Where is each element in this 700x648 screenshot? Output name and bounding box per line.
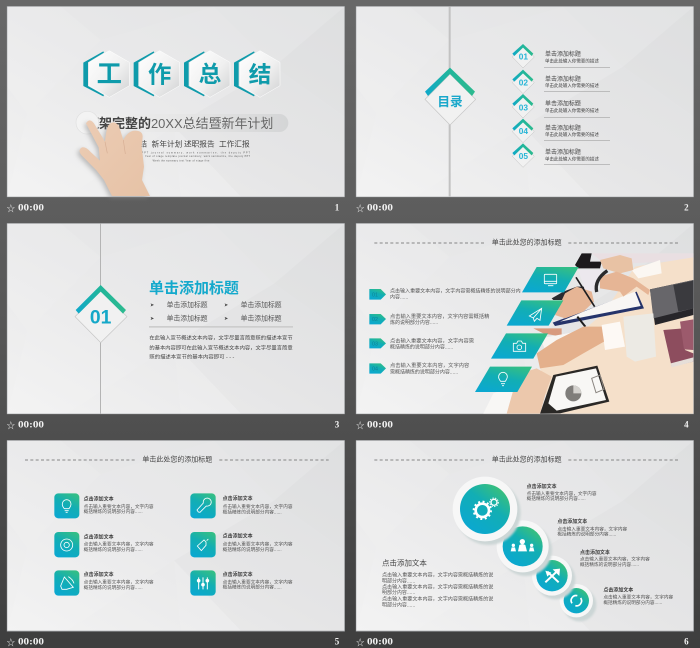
left text block: 明部分内容......: [382, 602, 415, 609]
slide 3 panel: [7, 223, 345, 414]
left text block: 明部分内容......: [382, 577, 415, 584]
section paragraph: 在此输入宣节概述文本内容，文字尽量言简意赅的描述本宣节: [149, 333, 293, 341]
text block 3: [580, 549, 650, 568]
item: flashlight: 点击输入重要文本内容，文字内容: [223, 540, 293, 547]
contents diamond 目录: [425, 68, 476, 125]
contents diamond 目录: 目录: [437, 95, 463, 109]
small english lines: Week the summary text Year of stage five: [153, 160, 210, 163]
circle 2: people icon: [497, 520, 552, 576]
title hexagons 工作总结: [83, 51, 280, 97]
item: light bulb: 概括精炼的说明部分内容......: [84, 508, 143, 515]
bullet list: ➤: [224, 302, 228, 308]
footer slide 2: 2: [684, 202, 689, 212]
slide 1 panel: [7, 6, 345, 197]
text block 2: 点击输入重要文本内容，文字内容: [557, 525, 628, 532]
office meeting photo: [483, 253, 693, 414]
text block 3: 概括精炼的说明部分内容......: [580, 561, 639, 568]
contents item 01: 01: [519, 52, 528, 62]
footer slide 4: 4: [684, 419, 689, 429]
footer slide 6: [356, 637, 689, 648]
small english lines: Year of stage template journal summary, work summarize, the deputy PPT: [145, 155, 251, 158]
point 02: 炼的说明部分内容......: [390, 319, 438, 326]
point 01: 01: [372, 292, 378, 298]
slide 4: photo with four points: [356, 223, 694, 414]
text block 1: 点击添加文本: [527, 483, 557, 490]
footer slide 1: 1: [335, 202, 340, 212]
slide 6 panel: [356, 440, 694, 631]
contents item 03: 单击添加标题: [545, 100, 581, 108]
subtitle pill: 框架完整的: [86, 116, 151, 131]
section paragraph: 的基本内容即可在此输入宣节概述文本内容，文字尽量言简意: [149, 343, 293, 351]
item: flashlight: 概括精炼的说明部分内容......: [223, 546, 282, 553]
left text block: [382, 558, 493, 609]
slide 2 panel: [356, 6, 694, 197]
subtitle keywords: 工作汇报: [219, 138, 250, 148]
circle 3: crossed arrows icon: [532, 556, 575, 599]
point 01: 点击输入重要文本内容，文字内容需概括精炼的说明部分内: [390, 288, 521, 295]
section paragraph: 赅的描述本宣节的基本内容即可 - - -: [149, 352, 235, 360]
text block 2: 概括精炼的说明部分内容......: [557, 531, 616, 538]
footer slide 6: 00:00: [367, 637, 394, 647]
item: flashlight: 点击添加文本: [223, 533, 253, 540]
item: disc: 概括精炼的说明部分内容......: [84, 546, 143, 553]
contents item 03: [512, 94, 610, 118]
contents item 04: 单击添加标题: [545, 124, 581, 132]
item: sliders: 点击输入重要文本内容，文字内容: [223, 578, 293, 585]
contents item 02: [512, 70, 610, 94]
title hexagons 工作总结: 总: [199, 61, 222, 87]
point 03: 03: [372, 341, 378, 347]
contents item 03: 单击此处输入你需要的描述: [545, 107, 599, 114]
section diamond 01: 01: [90, 307, 112, 328]
point 03: 点击输入重要文本内容，文字内容需: [390, 337, 474, 344]
footer slide 2: ☆: [356, 203, 365, 213]
footer slide 1: [7, 202, 340, 213]
text block 2: [557, 518, 628, 538]
footer slide 5: 00:00: [18, 637, 45, 647]
subtitle keywords: 述职报告: [184, 138, 215, 148]
footer slide 1: 00:00: [18, 202, 45, 212]
point 04: 04: [372, 366, 378, 372]
footer slide 5: 5: [335, 637, 340, 647]
bullet list: 单击添加标题: [167, 314, 208, 323]
item: disc: 点击输入重要文本内容，文字内容: [84, 541, 154, 548]
bullet list: 单击添加标题: [241, 314, 282, 323]
contents item 01: [512, 44, 610, 68]
small english lines: PPT journal summary, work summarize, the deputy PPT: [142, 151, 251, 154]
footer slide 5: [7, 637, 340, 648]
item: sliders: 概括精炼的说明部分内容......: [223, 584, 282, 591]
left text block: 点击输入重要文本内容，文字内容需概括精炼的说: [382, 583, 493, 590]
bullet list: 单击添加标题: [241, 300, 282, 309]
left text block: 明部分内容......: [382, 589, 415, 596]
press button: [76, 111, 99, 134]
point 02: 02: [372, 317, 378, 323]
slide 1: cover: [7, 6, 345, 198]
text block 4: 点击输入重要文本内容，文字内容: [603, 593, 674, 600]
footer slide 3: 00:00: [18, 419, 45, 429]
contents item 02: 02: [519, 78, 528, 88]
footer slide 6: ☆: [356, 638, 365, 648]
text block 4: 概括精炼的说明部分内容......: [603, 599, 662, 606]
subtitle keywords: 新年计划: [152, 138, 182, 148]
footer slide 5: ☆: [7, 638, 16, 648]
bullet list: ➤: [150, 302, 154, 308]
item: flashlight: [190, 532, 293, 557]
contents item 03: 03: [519, 103, 528, 113]
contents item 02: 单击此处输入你需要的描述: [545, 82, 599, 89]
contents item 04: 单击此处输入你需要的描述: [545, 131, 599, 138]
point 04: [369, 362, 469, 375]
parallelogram: paper plane icon: [507, 300, 563, 326]
subtitle pill: 20XX总结暨新年计划: [151, 116, 273, 131]
contents item 05: [512, 143, 610, 167]
footer slide 4: ☆: [356, 420, 365, 430]
item: megaphone: 点击添加文本: [84, 571, 114, 578]
hand pointer: [78, 120, 150, 198]
item: key: 概括精炼的说明部分内容......: [223, 509, 282, 516]
title hexagons 工作总结: 作: [148, 62, 171, 88]
bullet list: ➤: [224, 316, 228, 322]
item: megaphone: 点击输入重要文本内容，文字内容: [84, 579, 154, 586]
text block 3: 点击输入重要文本内容，文字内容: [580, 556, 650, 563]
vertical rule: [99, 224, 102, 414]
slide 5 panel: [7, 440, 345, 631]
left text block: 点击添加文本: [382, 558, 427, 568]
item: megaphone: 概括精炼的说明部分内容......: [84, 584, 143, 591]
footer slide 3: [7, 419, 340, 430]
title hexagons 工作总结: 结: [249, 61, 271, 87]
item: sliders: [190, 570, 293, 596]
divider: [149, 326, 293, 328]
subtitle keywords: [116, 138, 250, 148]
contents item 01: 单击此处输入你需要的描述: [545, 57, 599, 64]
contents item 05: 单击此处输入你需要的描述: [545, 155, 599, 162]
text block 1: 概括精炼的说明部分内容......: [527, 495, 586, 502]
point 01: [369, 288, 521, 301]
header: 单击此处您的添加标题: [492, 238, 562, 247]
item: light bulb: [54, 493, 154, 518]
contents item 04: [512, 119, 610, 143]
footer slide 6: 6: [684, 637, 689, 647]
header: 单击此处您的添加标题: [492, 455, 562, 464]
bullet list: ➤: [150, 316, 154, 322]
point 03: [369, 337, 474, 351]
footer slide 2: 00:00: [367, 202, 394, 212]
footer slide 2: [356, 202, 689, 213]
slide 5: six icon items: [7, 440, 345, 631]
small english lines: [142, 151, 251, 163]
slide 6: stepped circles: [356, 440, 694, 631]
footer slide 4: [356, 419, 689, 430]
point 02: 点击输入重要文本内容，文字内容需概括精: [390, 313, 489, 320]
vertical rule: [449, 7, 451, 196]
footer slide 1: ☆: [7, 203, 16, 213]
text block 1: 点击输入重要文本内容，文字内容: [527, 490, 597, 497]
left text block: 点击输入重要文本内容，文字内容需概括精炼的说: [382, 596, 493, 603]
item: light bulb: 点击输入重要文本内容，文字内容: [84, 503, 154, 510]
section diamond 01: [75, 285, 127, 343]
parallelogram: light bulb icon: [475, 367, 532, 392]
contents item 04: 04: [519, 126, 528, 136]
footer slide 3: ☆: [7, 420, 16, 430]
point 03: 概括精炼的说明部分内容......: [390, 344, 453, 351]
contents item 05: 05: [519, 151, 528, 161]
point 04: 点击输入重要文本内容，文字内容: [390, 362, 469, 369]
text block 2: 点击添加文本: [557, 518, 587, 525]
header: 单击此处您的添加标题: [142, 455, 212, 464]
footer slide 4: 00:00: [367, 419, 394, 429]
bullet list: 单击添加标题: [167, 300, 208, 309]
item: light bulb: 点击添加文本: [84, 496, 114, 503]
item: disc: 点击添加文本: [84, 533, 114, 540]
point 04: 需概括精炼的说明部分内容......: [390, 368, 458, 375]
text block 4: [603, 587, 674, 606]
item: disc: [54, 532, 154, 557]
text block 3: 点击添加文本: [580, 549, 610, 556]
circle 4: refresh icon: [560, 584, 596, 621]
parallelogram: camera icon: [491, 333, 548, 359]
item: key: 点击添加文本: [223, 495, 253, 502]
item: megaphone: [54, 570, 154, 596]
section heading: 单击添加标题: [149, 280, 239, 297]
point 01: 内容......: [390, 294, 408, 301]
point 02: [369, 313, 489, 326]
slide 2: contents: [356, 6, 694, 197]
item: sliders: 点击添加文本: [223, 571, 253, 578]
left text block: 点击输入重要文本内容，文字内容需概括精炼的说: [382, 571, 493, 578]
circle 1: gears icon: [453, 477, 521, 545]
slide 4 panel: [356, 223, 694, 414]
title hexagons 工作总结: 工: [97, 61, 122, 89]
contents item 01: 单击添加标题: [545, 50, 581, 58]
bullet list: [150, 300, 282, 323]
section paragraph: [149, 333, 293, 360]
text block 1: [527, 483, 597, 502]
footer slide 3: 3: [335, 419, 340, 429]
contents item 02: 单击添加标题: [545, 75, 581, 83]
subtitle pill: [77, 114, 288, 132]
item: key: [190, 493, 293, 518]
contents item 05: 单击添加标题: [545, 148, 581, 156]
text block 4: 点击添加文本: [603, 587, 633, 594]
slide 3: section 01: [7, 223, 345, 414]
parallelogram: monitor icon: [522, 267, 579, 292]
item: key: 点击输入重要文本内容，文字内容: [223, 503, 293, 510]
subtitle keywords: 工作总结: [116, 138, 147, 148]
